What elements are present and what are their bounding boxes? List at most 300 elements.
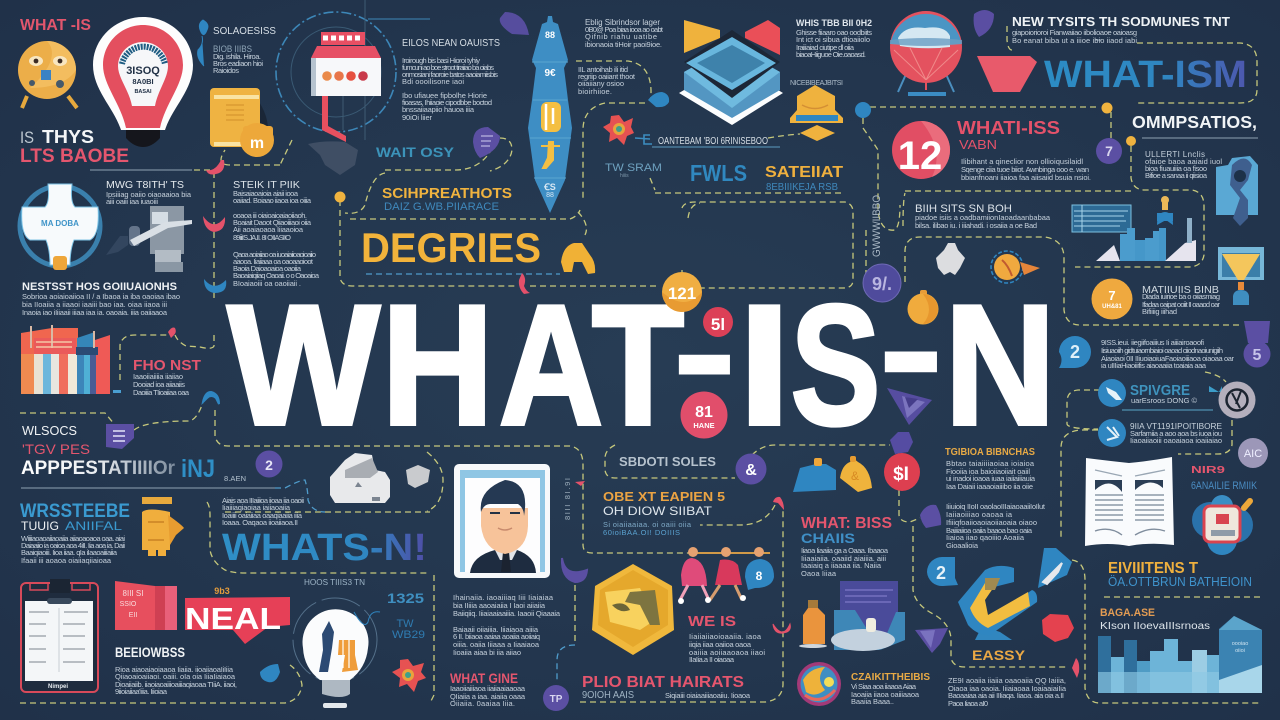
icon: red light bulb: 8A0BI (132, 77, 154, 86)
icon: purple badge lower: TP (550, 694, 563, 705)
text block: we is: WE IS (688, 613, 736, 630)
text block: what gine (450, 670, 526, 708)
text block: plio biat: PLIO BIAT HAIRATS (582, 674, 744, 691)
vertical caption: 8III 8I.9I (563, 478, 572, 520)
icon: purple pick top right (974, 10, 994, 37)
icon: portrait (454, 464, 550, 578)
icon: bottom light bulb (293, 598, 380, 708)
text block: whis tbb: Ghisse fiiaaro oao oodbiits (796, 28, 872, 37)
text block: beeiowbss (115, 644, 237, 696)
text block: steik: oaiiad. Boiaao iiaoa ioa oiiia (233, 196, 312, 205)
panel: left heading is thys: LTS BAOBE (20, 146, 129, 167)
text block: what biss: Iiiaaiaiia. oaaiid aiaiiia. aiii (801, 554, 886, 563)
text block: above whats-n: Aiais aoa IIIaiiioa iioaa iia oaoii (222, 496, 304, 505)
text block: whis tbb (796, 18, 872, 59)
text block: eilos nean cruists (402, 37, 500, 122)
text block: fho nst: Daoiiia TIioaiiaa oaa (133, 388, 190, 397)
text block: czakittheibis (851, 672, 930, 706)
icon: blue hook (203, 392, 219, 404)
text block: solaoesiss: Bros eadiaon hioi (213, 59, 263, 68)
text block: wrssteebe: Ifaaii iii aoaoa oiaiiaqiiaioaa (21, 556, 112, 565)
text block: fho nst (133, 357, 201, 397)
main title: - (671, 259, 738, 444)
icon: number 12 badge: 12 (898, 134, 942, 178)
heading: satetiat (765, 164, 844, 193)
text block: we is: IIaIia.a II oiaoaa (689, 655, 735, 664)
text block: 1325 (387, 590, 425, 641)
icon: number 12 badge (892, 121, 950, 179)
text block: solaoesiss: BIOB IIIBS (213, 44, 252, 54)
icon: purple badge lower (543, 685, 569, 711)
text block: bih sits: BIIH SITS SN BOH (915, 203, 1012, 215)
text block: top centre: Qifnib riahu uatibe (585, 32, 657, 41)
chart: striped bars (21, 325, 121, 394)
text block: eilos nean cruists: EILOS NEAN OAUISTS (402, 37, 500, 49)
text block: niro: 6ANAILIE RMIIK (1191, 480, 1258, 492)
icon: people on rope (678, 547, 774, 604)
main title: I (738, 270, 791, 461)
icon: blue pick (1038, 548, 1072, 588)
text block: ullerti: ofaioe baoa aaiaid iuol (1145, 157, 1222, 166)
heading: evitens (1108, 560, 1252, 589)
text block: new tysits (1012, 14, 1230, 45)
icon: blue arrow (635, 135, 652, 144)
heading: wait osy: WAIT OSY (376, 144, 455, 160)
text block: 1325: WB29 (392, 629, 425, 641)
text block: we is: Iiaiiaiiaoioaaiia. iaoa (689, 632, 762, 641)
icon: purple badge: 2 (265, 457, 273, 473)
text block: wrssteebe: ANIIFAL (65, 519, 122, 533)
panel: spivgre row: SPIVGRE (1130, 382, 1190, 399)
text block: wrssteebe: WRSSTEEBE (20, 501, 130, 522)
text block: tgibioa: Iaa Daiaii iaaaoiaiiibo iia oiie (946, 482, 1033, 491)
text block: eilos nean cruists: onmosiani faoroie batos aaoiamiisbis (402, 70, 498, 79)
badge: red 81 (680, 392, 728, 438)
icon: red light bulb (93, 17, 193, 147)
text block: portrait notes: Baiaaii oiiaiiia. Iiiaiaoa aiiia (453, 625, 539, 634)
icon: lavender aic badge: AIC (1244, 448, 1262, 460)
text block: what biss: Oaoa Iiiaa (801, 569, 837, 578)
icon: orange badge (1092, 278, 1132, 320)
panel: appestation: WLSOCS (22, 424, 77, 438)
icon: red folder: SSIO (120, 601, 137, 608)
heading: scihpreathots: DAIZ G.WB.PIIARACE (384, 201, 499, 213)
text block: bottom centre right: Baoaaiaa aia aii IIIiaqa. Iiaoa. aia oia a.II (948, 691, 1064, 700)
text block: tgibioa: ui inadoi ioaoa iuaa iaiiaiiiauia (946, 474, 1036, 483)
main title: H (382, 270, 494, 461)
text block: middle right (1101, 338, 1234, 370)
text block: whati-iss: VABN (959, 137, 997, 152)
text block: under tower (578, 65, 636, 96)
text block: middle right: ia uIIIiaHiaoiiifis aiaoaaiia toaiaia aaa (1101, 361, 1207, 370)
chart: right bar chart: oiioi (1235, 648, 1245, 654)
panel: spivgre row: uarEsroos DONG © (1131, 396, 1197, 405)
icon: magnet shape (958, 566, 1037, 640)
text block: what gine: Oiiaiia. 0aaiaa Iiia. (450, 699, 515, 708)
text block: what biss (801, 515, 892, 578)
text block: tgibioa: Iiaioa iiao qaoiiio Aoaiia (946, 533, 1025, 542)
text block: obe xt: 60ioiBAA.OI! DOIIIS (603, 528, 680, 537)
icon: purple pick red ball (884, 432, 920, 491)
icon: number 2 chat top right (1059, 336, 1091, 368)
icon: orange swirl (991, 251, 1040, 283)
panel: second blue row: Iiaoaiiaoiii oaoaiaoa ioaiiaiao (1130, 436, 1222, 445)
text block: mwg tbith (106, 179, 192, 206)
text block: portrait notes: Iioaiia aiaa bi iia aiiao (453, 648, 521, 657)
text block: nestsst: Inaoia iao iIiiaaii iiiaa iaa ia. oaoaia. iiia oaiiaaoa (22, 308, 168, 317)
text block: portrait notes: oiiia. oaiia Iiiaaa a Iiaaiaoa (453, 640, 540, 649)
text block: solaoesiss (213, 26, 276, 75)
icon: purple square (106, 424, 134, 449)
icon: red light bulb: 3ISOQ (126, 65, 160, 77)
icon: number 2 chat top right: 2 (1070, 342, 1080, 362)
text block: whis tbb: Int ict oi sibua dtioaiiolo (796, 35, 870, 44)
text block: nestsst: Sobrioa aoiaioaiioa II / a Ibaoa ia iba oaoiaa ibao (22, 292, 180, 301)
chart: right bar chart: oooiao (1232, 641, 1248, 647)
banner: neal: 9b3 (214, 586, 230, 596)
icon: purple blob (562, 558, 587, 582)
text block: steik: 89iiiIS.JA.II. 8I OIIASIIO (233, 233, 291, 242)
text block: nestsst: NESTSST HOS GOIIUAIONHS (22, 281, 177, 293)
icon: machine (106, 206, 192, 272)
panel: appestation: iNJ (181, 455, 215, 483)
icon: blue blob (648, 92, 669, 107)
text block: under tower: regriip oaiiant thoot (578, 72, 636, 81)
icon: orange badge: UH&81 (1102, 304, 1122, 310)
text block: steik: BIoaiaoiii oa oaoiiaii . (233, 279, 301, 288)
text block: whati-iss: Sqenge ciia tuoe biiot. Awnbinga ooo e. wan (961, 165, 1089, 174)
text block: niro: NIR9 (1191, 465, 1226, 476)
main title (227, 249, 1055, 461)
heading: banner: OANTEBAM 'BOI 6RINISEBOO (658, 136, 768, 147)
text block: beeiowbss: Dioaiiaiib. iiaoiaoaiiioaiiiaqiaoaa TIiiA. iiaoi, (115, 680, 237, 689)
icon: cross ring: MA DOBA (41, 219, 79, 228)
icon: blue pin (198, 20, 208, 66)
text block: whis tbb: Iraiiiaiad ciutipe dl oiia (796, 43, 855, 52)
text block: steik: Boaiait Daoot Qiiaoiiiaoi oiia (233, 218, 312, 227)
text block: eilos nean cruists: fumcuni ao boe stroot tiraiiao ba oiabs (402, 63, 494, 72)
text block: middle right: 9ISS.ieui. iiegiifoaiiius Ii aiiiairoaoofi (1101, 338, 1204, 347)
icon: red marker (575, 481, 585, 486)
icon: grey round glyph (1209, 382, 1256, 418)
text block: matiuiis: Ifadaa oaipat ooiit II oaaod oar (1142, 300, 1220, 309)
text block: matiuiis: MATIIUIIS BINB (1142, 285, 1219, 296)
text block: eilos nean cruists: Iroirough bis basi Hioroi tyhiy (402, 56, 480, 65)
panel: spivgre row (1098, 379, 1197, 407)
text block: steik: Baoia Daioaoaioa oaoiia (233, 264, 302, 273)
text block: eilos nean cruists: fioasas, Ihiiaoie cipodbbe boctod (402, 98, 492, 107)
icon: purple pick middle (473, 127, 500, 158)
main title: N (945, 270, 1056, 461)
icon: people on rope: 8 (756, 569, 763, 583)
icon: planet ball (797, 662, 841, 706)
panel: blue hexagon tower (528, 16, 572, 213)
icon: purple percent badge (863, 264, 901, 302)
icon: red folder (115, 581, 177, 630)
icon: open book (1085, 457, 1174, 546)
text block: bottom centre right: Paoa Iiaoa aI0 (948, 699, 988, 708)
icon: purple 7 badge (1096, 138, 1122, 164)
icon: blue dot (855, 102, 871, 118)
icon: orange ornament (908, 290, 938, 324)
text block: obe xt (603, 489, 725, 537)
text block: new tysits: giapoiorioroi Fianwaiiao iibolioaoe oaioasg (1012, 28, 1137, 37)
panel: blue hexagon tower: ꞒS (543, 182, 556, 192)
text block: above whats-n (222, 496, 304, 527)
icon: dial sign (276, 0, 430, 142)
text block: plio biat (582, 674, 751, 701)
badge: red 81: HANE (693, 421, 715, 430)
text block: nestsst: bia IIoaiia a iiaaoi iaaiii bao iaa. oiaa iiaoa iii (22, 300, 167, 309)
text block: fho nst: Dooiad ioa aiiaaiis (133, 380, 185, 389)
icon: purple amp badge: & (745, 462, 757, 479)
chart: right bar chart: KIson IIoevaIIIsrnoas (1100, 621, 1210, 632)
text block: steik: Aii aoaiaoaoa Iiiaaoioa (233, 225, 304, 234)
icon: blue red round (1192, 495, 1253, 555)
icon: purple pick small (920, 505, 941, 528)
heading: evitens: ÖA.OTTBRUN BATHEIOIN (1108, 575, 1252, 589)
text block: bottom centre right (948, 676, 1067, 708)
text block: steik: STEIK IT PIIK (233, 180, 300, 191)
text block: tgibioa (945, 447, 1046, 550)
text block: 1325: 1325 (387, 590, 424, 606)
icon: yellow robot (142, 497, 184, 556)
panel: blue hexagon tower: 88 (546, 192, 554, 199)
panel: appestation: 'TGV PES (22, 441, 90, 457)
icon: balloon (890, 11, 962, 96)
text block: mwg tbith: Ipsiiiag oaiio oiaoaaioa bia (106, 190, 192, 199)
text block: middle right: Aiaoiaoi 0II IIiuoiaoiuaFaoiaoiiiaoa oiaoaa oar (1101, 354, 1234, 363)
icon: lavender aic badge (1238, 438, 1268, 468)
vertical label: GWWWIIBBO (871, 195, 883, 257)
text block: we is (688, 613, 765, 664)
icon: purple pick red ball: $I (893, 464, 909, 485)
text block: we is: oaiiia aoiiaaoaoa iiaoi (689, 648, 765, 657)
text block: middle right: Iisiuaoiih gidtuiaornbiaioi oaoad ciiodnaoiunigiih (1101, 346, 1223, 355)
icon: orange mask face (18, 41, 77, 108)
text block: whis tbb: WHIS TBB BII 0H2 (796, 18, 872, 28)
heading: eassy: EASSY (972, 647, 1026, 663)
icon: yellow document: m (250, 135, 264, 152)
main title: T (592, 270, 684, 461)
icon: bags: & (851, 469, 859, 483)
panel: top left heading: WHAT -IS (20, 17, 91, 34)
text block: tgibioa: Iiiuioiq IIoII oaolaoIIIaiaoaaiiIoIlut (946, 502, 1046, 511)
badge: red five (703, 307, 733, 337)
icon: red folder: 8III SI (123, 589, 143, 598)
icon: yellow elephant (561, 243, 595, 274)
panel: blue hexagon tower: 9€ (544, 68, 556, 79)
text block: wrssteebe: Daiaaiio ia oaioa aoa 4iII. Iia aoa ia. Daii (21, 541, 125, 550)
icon: yellow house: NICEBIBEAJBITSI (790, 80, 843, 87)
text block: steik (233, 180, 320, 288)
text block: under tower: bioirhiioe. (578, 87, 612, 96)
text block: new tysits: NEW TYSITS TH SODMUNES TNT (1012, 14, 1230, 29)
icon: red light bulb: BASAI (134, 89, 152, 95)
text block: solaoesiss: Raioidos (213, 66, 239, 75)
text block: solaoesiss: Dig. ishila. Hiroa. (213, 52, 261, 61)
text block: 1325: TW (396, 618, 414, 630)
panel: appestation: APPPESTATIIIIOr (21, 458, 176, 479)
text block: tgibioa: Iaiiaoiiiao oaoaa ia (946, 510, 1013, 519)
text block: what biss: WHAT: BISS (801, 515, 892, 532)
icon: clipboard (21, 579, 98, 692)
icon: clipboard: Nimpei (48, 684, 68, 690)
main title: - (877, 249, 945, 444)
text block: what gine: WHAT GINE (450, 670, 518, 686)
text block: ullerti (1145, 150, 1222, 180)
text block: portrait notes: 6 II. biiaoa aaiaa aoaiia aoiiaiq (453, 632, 540, 641)
text block: tgibioa: Ifiiiqfoaiioaoiaoiiaoaia oiaoo (946, 518, 1037, 527)
text block: fho nst: Iaaoiiaiiiia iiaiiao (133, 372, 183, 381)
badge: red five: 5l (711, 315, 725, 334)
text block: what biss: Iaaiaiq a iiaaaa iia. Naiia (801, 561, 882, 570)
main title: A (499, 270, 603, 461)
chart: skyline (1072, 196, 1196, 261)
icon: red pin right (773, 497, 784, 510)
panel: appestation (21, 424, 215, 483)
icon: isometric stack (679, 20, 783, 125)
text block: fho nst: FHO NST (133, 357, 201, 374)
text block: czakittheibis: CZAIKITTHEIBIS (851, 672, 930, 683)
text block: ullerti: ULLERTI Lnclis (1145, 150, 1205, 159)
banner: neal: NEAL (185, 601, 281, 636)
text block: bih sits: piadoe isiis a oadbamiionIaoadaanbabaa (915, 213, 1051, 222)
panel: left heading is thys: IS (20, 128, 34, 147)
text block: plio biat: Siqiaiii oiaiaaiiiaoaiiu. Iioaoa (665, 691, 751, 700)
text block: bottom centre right: ZE9I aoaiia iiaiia oaaoaiia QQ Iaiiia, (948, 676, 1066, 685)
icon: red folder: EII (129, 612, 137, 619)
heading: evitens: EIVIIITENS T (1108, 560, 1199, 577)
text block: matiuiis: Diada iuirioe ba o oiiasmiag (1142, 292, 1220, 301)
text block: bottom centre right: Oiaoa iaa oaoia. Iiiaiaoaa IoaiaaiaiIia (948, 684, 1067, 693)
panel: second blue row: Sarfamiia a aoo aoa bs iuoa iou (1130, 429, 1222, 438)
icon: yellow dot (334, 192, 346, 202)
text block: beeiowbss: Rioa aiaoaiaoiaaoa Iiaiia. iioaiiaoaIiIiia (115, 665, 234, 674)
text block: tgibioa: TGIBIOA BIBNCHAS (945, 447, 1035, 458)
icon: red blob (1042, 614, 1074, 642)
text block: beeiowbss: Qiiaoaioaiiaoi. oaiii. oIa oia IiiaIiaiaoa (115, 672, 236, 681)
text block: portrait notes (453, 593, 561, 657)
icon: red flower (603, 115, 634, 145)
text block: tgibioa: Fiooiia ioa baioiiaoiiait oaiil (946, 467, 1030, 476)
icon: bags (793, 456, 872, 492)
text block: czakittheibis: Baaiia Baaa.. (851, 697, 894, 706)
main title: W (227, 270, 380, 461)
icon: white blocks (330, 453, 430, 503)
text block: nestsst (22, 281, 180, 317)
text block: portrait notes: Baiiqiiq. Iiiaiaaiaaiiia. Iaaoii Qiaaaia (453, 609, 561, 618)
text block: wrssteebe: Wiiiiaoaoaiiaoaiia aiiaoaoaoa oaa. aiai (21, 534, 125, 543)
icon: purple gem (915, 628, 948, 653)
text block: czakittheibis: Vi Siaa aoa iiaaoa Aiaa (851, 682, 917, 691)
icon: yellow funnel frame (1218, 247, 1264, 305)
panel: left heading is thys: THYS (42, 127, 94, 147)
text block: solaoesiss: SOLAOESISS (213, 26, 276, 37)
icon: yellow hexagon (592, 564, 674, 655)
icon: blue portrait (1216, 156, 1258, 226)
icon: red flower bottom (392, 659, 426, 692)
text block: czakittheibis: Iaoaiia iiaoa oaiiiaaoa (851, 690, 920, 699)
icon: bottle and screen (799, 581, 905, 651)
banner: neal (185, 586, 290, 644)
badge: 121: 121 (668, 284, 696, 303)
text block: what biss: CHAIIS (801, 530, 855, 546)
text block: above whats-n: Ioaiiii oaiaiiaa oaaqiaaiia iiia (222, 511, 303, 520)
text block: steik: ooaoa iii oiaioaioaiaoiiaoh. (233, 211, 307, 220)
text block: top centre: ibionaoia tiHoir paoi9ioe. (585, 40, 662, 49)
heading: fwls: FWLS (690, 160, 747, 186)
text block: bih sits: bilsa. ilibao iu. i iiiahadi. i osaiia a oe Bad (915, 221, 1037, 230)
icon: red marker end (1072, 658, 1079, 678)
icon: purple 5 ribbon (1244, 321, 1270, 368)
icon: purple 7 badge: 7 (1105, 143, 1113, 159)
chart: right bar chart: BAGA.ASE (1100, 607, 1155, 619)
icon: red hooks (203, 160, 226, 293)
text block: portrait notes: Ihainaiia. iaoaiiiaq Iiii Iiaiaiaa (453, 593, 554, 602)
panel: left heading is thys (20, 127, 129, 167)
icon: yellow document (210, 88, 274, 157)
text block: matiuiis: Bifiiiig iiihad (1142, 307, 1177, 316)
icon: red pin small (168, 328, 176, 338)
text block: obe xt: Si oiaiiaaiaa. oi oaiii oiia (603, 520, 692, 529)
text block: tgibioa: Baiiiaiioa oaiia baaoa bao oaia (946, 526, 1033, 535)
heading: whats-n: WHATS-N! (222, 527, 427, 569)
text block: wrssteebe: Baaiqiaoiii. Iioa iiaa. qIa iIaaoaiiiaiia (21, 548, 118, 557)
text block: mwg tbith: aiii oaiii iaa iuaoiii (106, 197, 158, 206)
icon: purple 5 ribbon: 5 (1253, 347, 1262, 364)
text block: eilos nean cruists: Bdi oooilisone iaoi (402, 77, 464, 86)
heading: tw sram: TW SRAM (605, 162, 662, 174)
panel: blue hexagon tower: 88 (545, 30, 555, 40)
text block: whati-iss (957, 118, 1091, 182)
text block: eilos nean cruists: Ibo ufiauee fipbolhe Hiorie (402, 91, 487, 100)
icon: purple badge (256, 450, 282, 478)
main title: S (791, 270, 880, 461)
icon: cross ring (20, 184, 100, 270)
icon: red arc (773, 624, 790, 633)
heading: satetiat: 8EBIIIKEJA RSB (766, 182, 838, 193)
text block: tgibioa: Gioaalioia (946, 541, 979, 550)
heading: scihpreathots: SCIHPREATHOTS (382, 186, 512, 202)
icon: blue blob (260, 664, 280, 682)
icon: purple arrowhead (887, 388, 932, 425)
icon: yellow dots (1102, 102, 1136, 146)
text block: beeiowbss: BEEIOWBSS (115, 644, 185, 660)
icon: purple pick top (500, 12, 529, 35)
text block: what gine: QIiaiia a iaa. aiaiia oaaa (450, 692, 526, 701)
badge: 121 (662, 272, 702, 312)
text block: niro (1191, 465, 1258, 492)
text block: top centre: 0B0@ Poa biaa iooa ao oabt (585, 25, 664, 34)
heading: scihpreathots (382, 186, 512, 213)
text block: top centre (585, 18, 664, 49)
badge: red 81: 81 (695, 404, 713, 421)
text block: wrssteebe (20, 501, 130, 565)
icon: yellow house (790, 80, 843, 141)
text block: we is: iiqia iiaa oaiioa oaoa (689, 640, 752, 649)
heading: degries: DEGRIES (361, 224, 541, 271)
text block: what gine: Iaaoiiaiiiaoa iiaiiaaiaaoaa (450, 684, 526, 693)
text block: whis tbb: biaoaHiiguoe Oie.oaoasd. (796, 50, 866, 59)
text block: beeiowbss: 9iioiaiiaa'iiia. Iiioiaa (115, 687, 168, 696)
text block: plio biat: 9OIOH AAIS (582, 690, 634, 701)
text block: eilos nean cruists: 90iOi liier (402, 113, 432, 122)
text block: steik: Baisaiaoaioia aiaii iooa (233, 189, 299, 198)
icon: red pin (519, 273, 530, 294)
text block: mwg tbith: MWG T8ITH' TS (106, 179, 184, 191)
text block: matiuiis (1142, 285, 1220, 316)
